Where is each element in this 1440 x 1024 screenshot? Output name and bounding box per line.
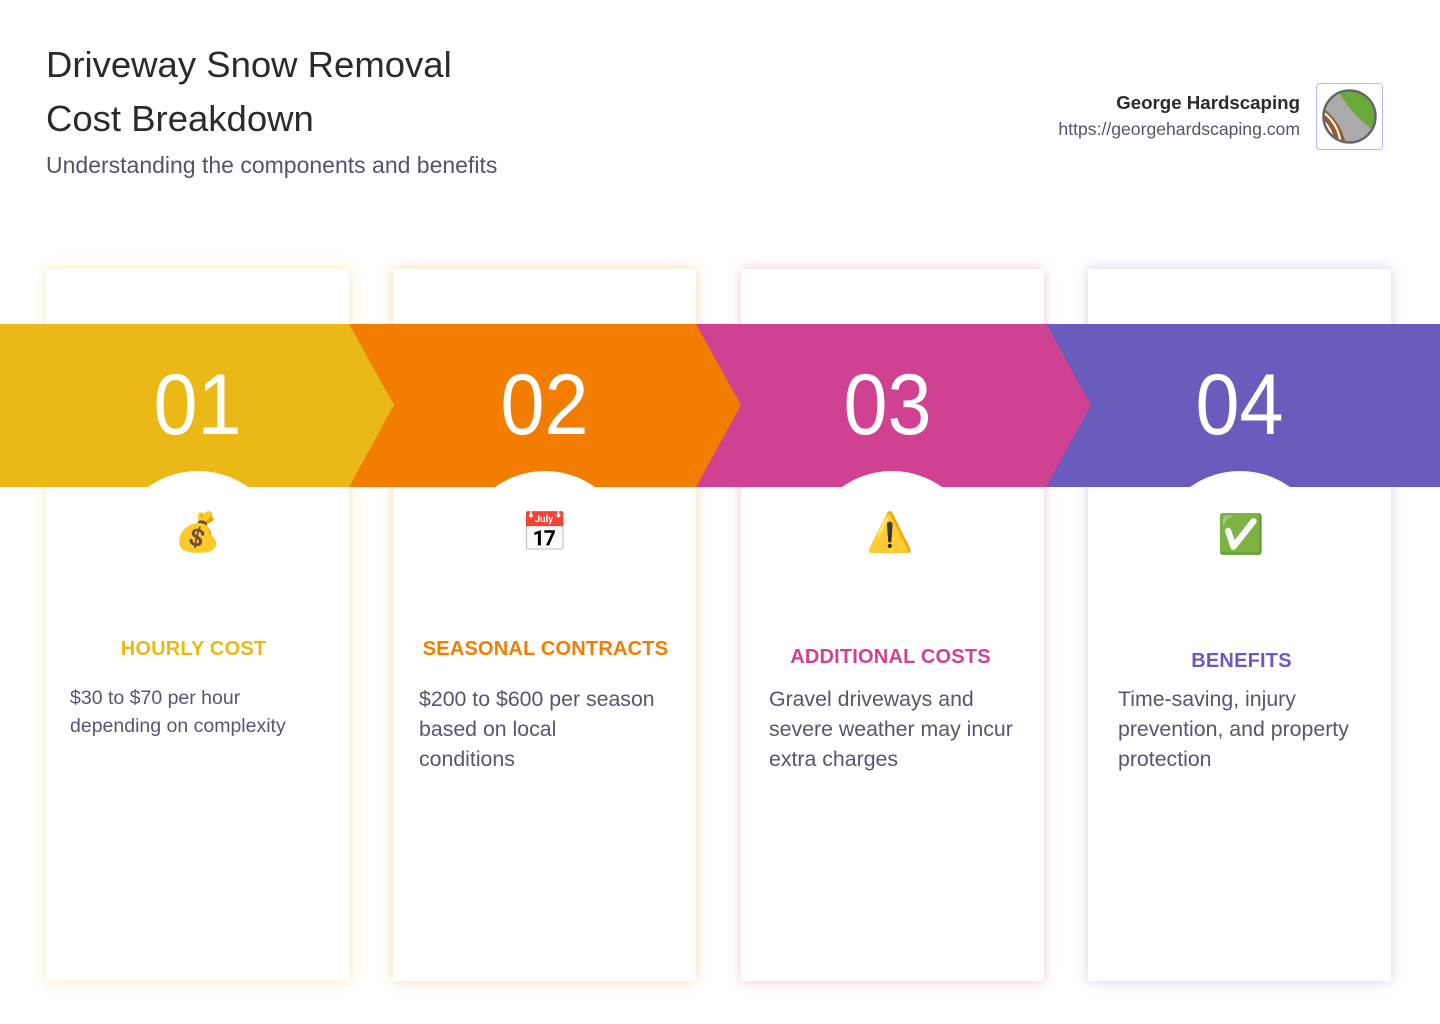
card 2 title: SEASONAL CONTRACTS: [423, 638, 668, 660]
card 4 text: protection: [1118, 747, 1212, 771]
title: Cost Breakdown: [46, 98, 314, 139]
card 1 text: $30 to $70 per hour: [70, 687, 240, 709]
card 4: [1088, 269, 1391, 981]
number 02: 02: [500, 357, 589, 453]
card 2: [393, 269, 696, 981]
card 4 title: BENEFITS: [1191, 650, 1292, 672]
card 4 text: [1118, 687, 1349, 771]
title: [46, 44, 452, 139]
number 03: 03: [843, 357, 932, 453]
banner arrows: [0, 324, 1440, 487]
card 1 text: depending on complexity: [70, 715, 286, 737]
card 1 text: [70, 687, 286, 737]
card 3 text: extra charges: [769, 747, 898, 771]
title: Driveway Snow Removal: [46, 44, 452, 85]
brand url: https://georgehardscaping.com: [1058, 119, 1300, 139]
icon: calendar: 📅: [521, 511, 569, 555]
icon: money bag: 💰: [174, 511, 222, 555]
card 2 text: based on local: [419, 717, 556, 741]
card 1: [46, 269, 349, 981]
number 01: 01: [153, 357, 242, 453]
brand block: [1058, 83, 1383, 150]
card 2 text: [419, 687, 655, 771]
card 3 title: ADDITIONAL COSTS: [790, 646, 991, 668]
icon: logo: [1316, 83, 1383, 150]
subtitle: Understanding the components and benefits: [46, 152, 497, 178]
card 3: [741, 269, 1044, 981]
card 2 text: conditions: [419, 747, 515, 771]
card 1 title: HOURLY COST: [121, 638, 266, 660]
icon: warning: ⚠️: [866, 511, 914, 555]
brand name: George Hardscaping: [1116, 92, 1300, 113]
card 3 text: Gravel driveways and: [769, 687, 974, 711]
card 4 text: prevention, and property: [1118, 717, 1349, 741]
card 3 text: severe weather may incur: [769, 717, 1013, 741]
card 4 text: Time-saving, injury: [1118, 687, 1296, 711]
card 3 text: [769, 687, 1013, 771]
number 04: 04: [1195, 357, 1284, 453]
icon: check: ✅: [1217, 513, 1265, 557]
card 2 text: $200 to $600 per season: [419, 687, 655, 711]
